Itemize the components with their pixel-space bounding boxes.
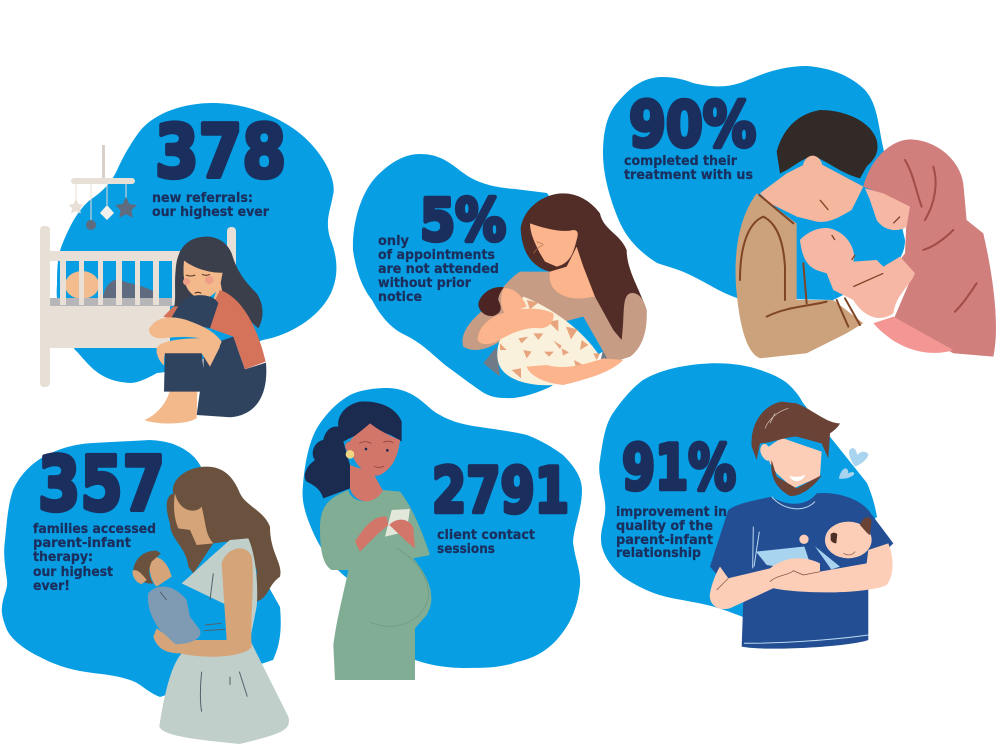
text: 357 caption: therapy: bbox=[33, 549, 93, 565]
text: 90% caption: completed their bbox=[624, 153, 737, 169]
text: 5% caption: without prior bbox=[378, 275, 471, 291]
icon: hearts bbox=[839, 448, 868, 479]
text: 91% caption: parent-infant bbox=[616, 532, 714, 548]
text: 2791 caption bbox=[437, 527, 536, 557]
text: 357 caption: ever! bbox=[33, 578, 70, 594]
text: 91% caption: quality of the bbox=[616, 518, 713, 534]
text: 2791 caption: sessions bbox=[437, 541, 495, 557]
text: 5% caption: of appointments bbox=[378, 247, 495, 263]
text: 91% caption: improvement in bbox=[616, 504, 727, 520]
panel: 378 new referrals bbox=[40, 103, 336, 424]
text: 5% caption: only bbox=[378, 233, 409, 249]
blob: 5% bbox=[353, 154, 620, 398]
text: new referrals: our highest ever bbox=[152, 204, 269, 220]
blob: 378 bbox=[57, 103, 336, 383]
panel: 5% appointments bbox=[353, 154, 647, 398]
text: 5% caption: notice bbox=[378, 289, 422, 305]
number: 2791: 2791 bbox=[432, 454, 569, 527]
number: 90%: 90% bbox=[629, 88, 756, 161]
illustration: pregnant woman with phone bbox=[305, 401, 431, 680]
number: 378: 378 bbox=[155, 110, 286, 195]
text: 91% caption: relationship bbox=[616, 545, 701, 561]
text: new referrals: new referrals: bbox=[152, 190, 253, 206]
blob: 2791 bbox=[303, 388, 582, 668]
blob: 357 bbox=[2, 440, 281, 697]
illustration: crib and mobile bbox=[40, 145, 236, 387]
text: 357 caption: parent-infant bbox=[33, 535, 132, 551]
text: 90% caption bbox=[624, 153, 753, 183]
panel: 90% completed treatment bbox=[603, 66, 996, 358]
text: 5% caption bbox=[378, 233, 499, 305]
panel: 2791 client contact sessions bbox=[303, 388, 582, 680]
blob: 91% bbox=[599, 363, 877, 617]
text: 90% caption: treatment with us bbox=[624, 167, 753, 183]
panel: 91% improvement bbox=[599, 363, 893, 649]
blob: 90% bbox=[603, 66, 905, 300]
illustration: couple with newborn bbox=[736, 110, 996, 358]
illustration: mother cradling baby bbox=[462, 193, 647, 385]
panel: 357 families bbox=[2, 440, 289, 744]
number: 357: 357 bbox=[38, 440, 165, 528]
number: 5%: 5% bbox=[420, 186, 506, 254]
number: 91%: 91% bbox=[622, 431, 736, 504]
illustration: sad mother hugging knees bbox=[144, 237, 266, 424]
text: 357 caption: our highest bbox=[33, 564, 113, 580]
text: new referrals bbox=[152, 190, 269, 220]
illustration: mother holding baby bbox=[133, 467, 289, 744]
text: 91% caption bbox=[616, 504, 727, 561]
text: 357 caption: families accessed bbox=[33, 521, 156, 537]
text: 5% caption: are not attended bbox=[378, 261, 499, 277]
illustration: father holding baby bbox=[710, 402, 893, 649]
text: 357 caption bbox=[33, 521, 156, 594]
text: 2791 caption: client contact bbox=[437, 527, 536, 543]
